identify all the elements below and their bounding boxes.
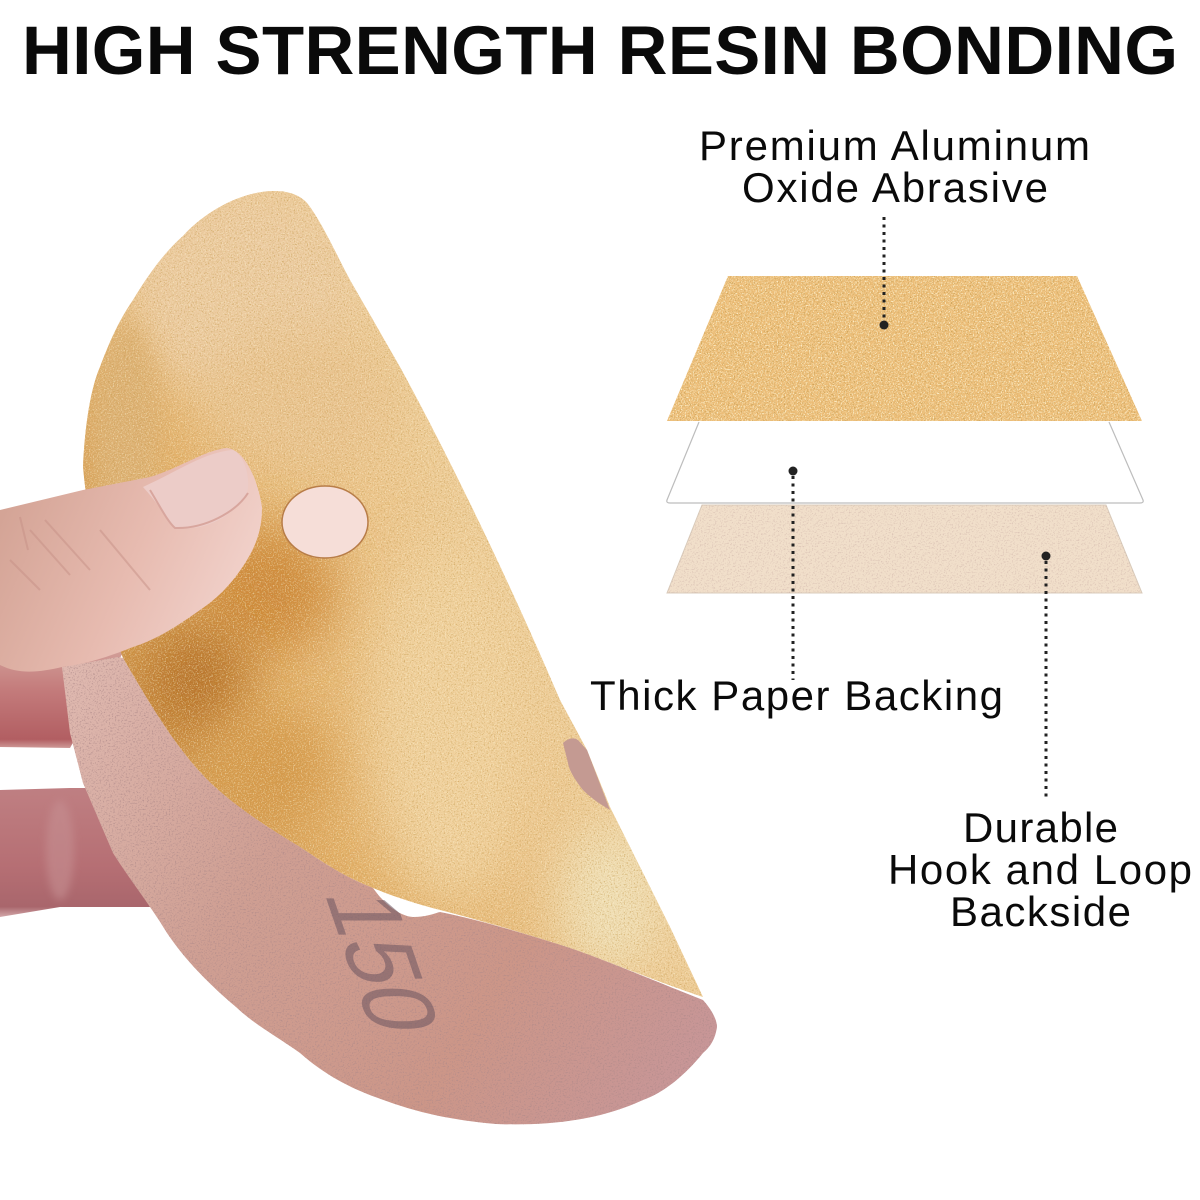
label: Premium Aluminum Oxide Abrasive: Oxide Abrasive [742,164,1048,211]
photo: hand holding folded sanding disc [0,180,720,1124]
thumb [0,448,262,672]
label: Durable Hook and Loop Backside: Backside [950,888,1131,935]
exploded layer diagram [667,276,1143,593]
label: Durable Hook and Loop Backside: Durable [963,804,1118,851]
label: Premium Aluminum Oxide Abrasive [699,122,1090,211]
lower finger [0,788,150,917]
middle finger [0,640,130,748]
label: Premium Aluminum Oxide Abrasive: Premium Aluminum [699,122,1090,169]
label: Durable Hook and Loop Backside: Hook and Loop [888,846,1192,893]
leader: paper backing [788,466,798,680]
layer: hook and loop [667,505,1142,593]
layer: paper backing [667,422,1143,503]
hole in disc: pink circle [282,486,368,558]
hole in disc: right edge [563,738,610,810]
label: Durable Hook and Loop Backside [888,804,1192,935]
leader: hook and loop [1042,552,1050,800]
thumbnail [143,450,248,528]
pink hook and loop back of disc [62,657,717,1124]
printed grit number: 150 [302,892,462,1032]
leader: abrasive [880,217,888,330]
label: Thick Paper Backing: Thick Paper Backing [590,672,1003,719]
gold abrasive face of disc [83,191,703,997]
title: HIGH STRENGTH RESIN BONDING [22,12,1178,89]
layer: aluminum oxide abrasive [667,276,1142,421]
